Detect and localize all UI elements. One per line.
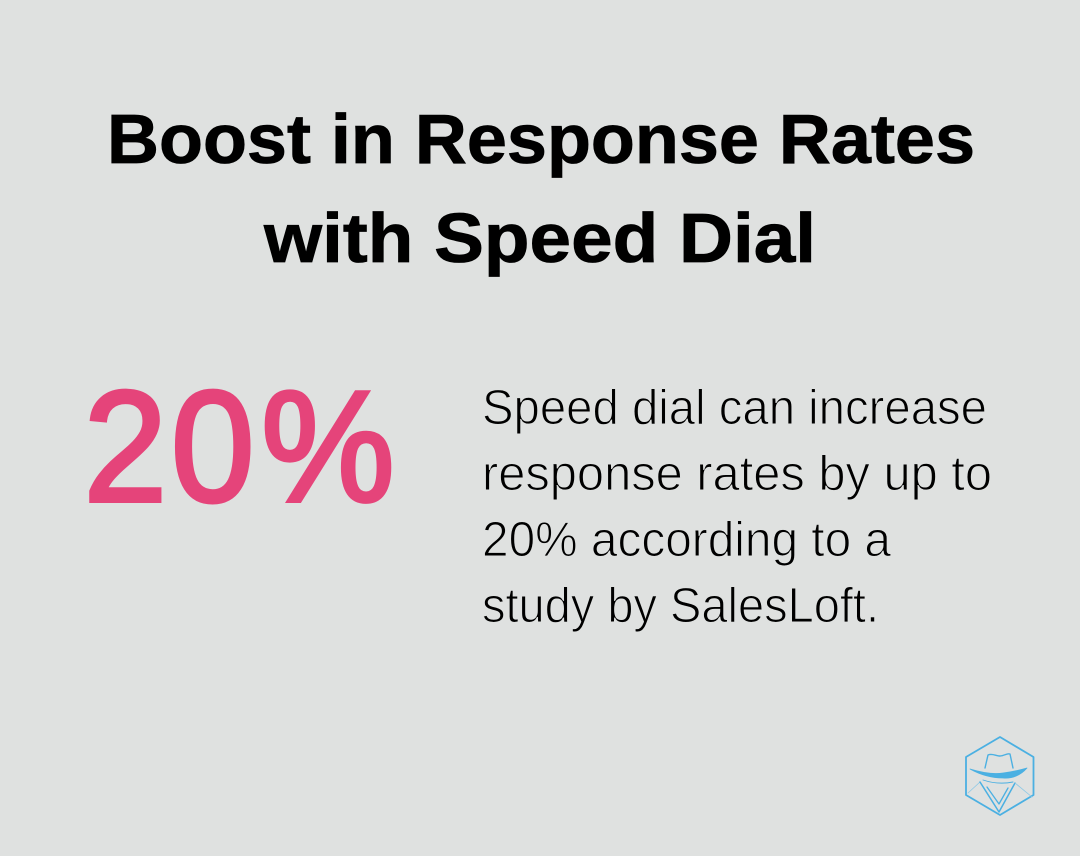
icon: logo, hexagon with hat and coat	[966, 737, 1034, 815]
description text: response rates by up to	[482, 447, 992, 501]
big statistic: 20%: 20%	[84, 357, 395, 535]
title: with Speed Dial	[263, 199, 816, 277]
description text: 20% according to a	[482, 513, 892, 567]
description text: study by SalesLoft.	[482, 579, 879, 633]
title	[107, 100, 975, 277]
description text	[482, 381, 992, 633]
title: Boost in Response Rates	[107, 100, 975, 178]
description text: Speed dial can increase	[482, 381, 987, 435]
